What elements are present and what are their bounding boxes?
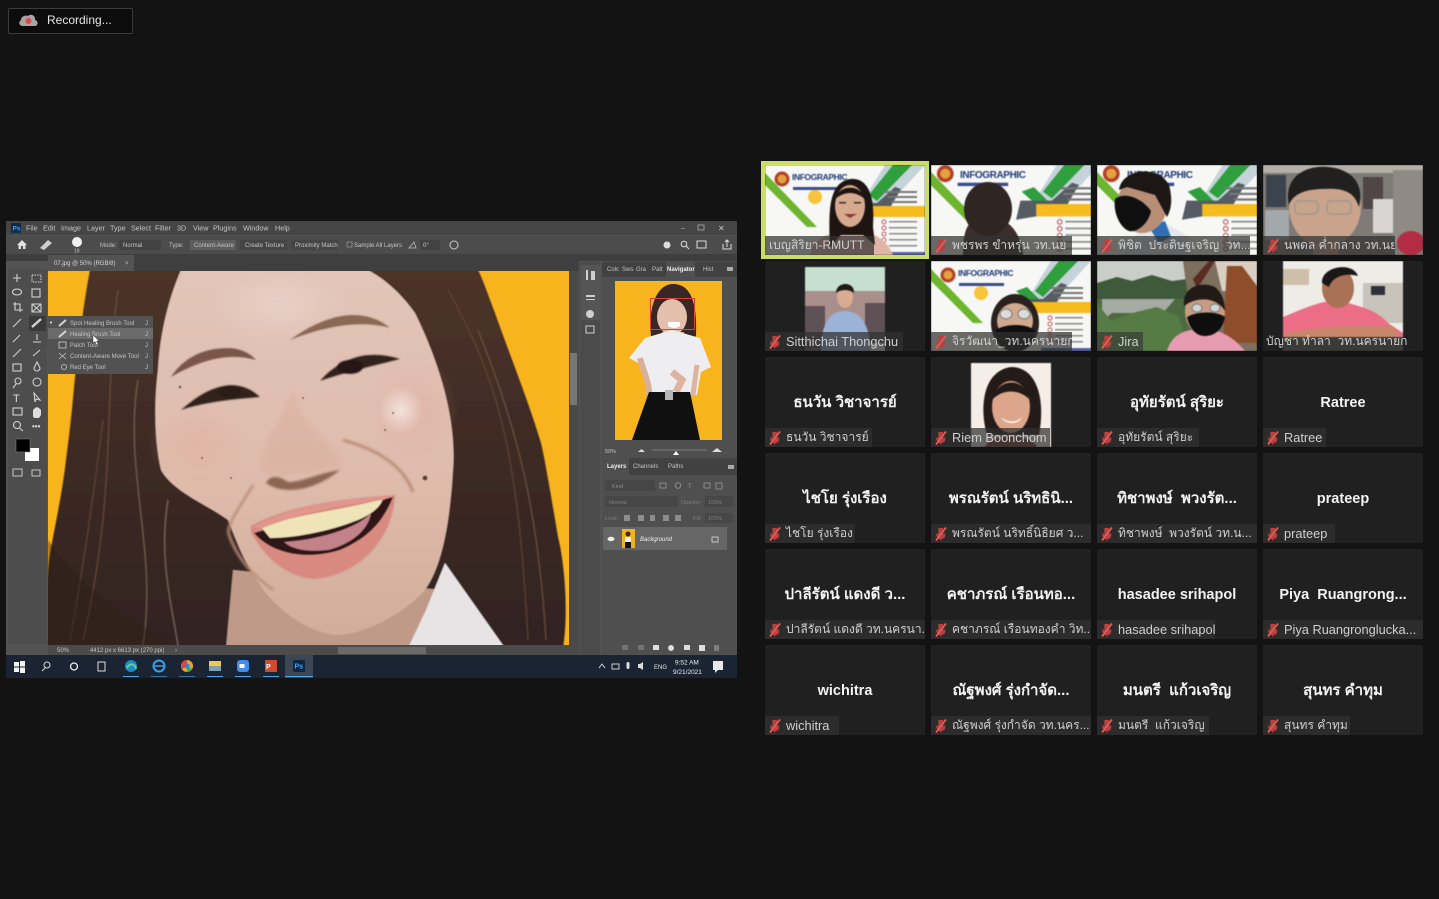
tool bar: T (13, 393, 20, 405)
participant tile: hasadee srihapol (1097, 549, 1257, 639)
video: presenter over infographic backdrop (765, 165, 925, 255)
participant tile: คชาภรณ์ (931, 549, 1091, 639)
display name: ณัฐพงศ์ รุ่งกำจัด... (952, 682, 1070, 699)
vertical scrollbar (569, 271, 579, 645)
name label (931, 716, 1091, 735)
participant tile: อุทัยรัตน์ สุริยะ (1097, 357, 1257, 447)
participant tile: พชรพร (931, 165, 1091, 255)
name label (931, 524, 1091, 543)
name label (1097, 524, 1257, 543)
video: man with glasses in office (1263, 165, 1423, 255)
participant tile: พิชิต (1097, 165, 1257, 255)
options bar: Mode: (100, 243, 117, 249)
panel: layers: Normal (609, 500, 627, 506)
windows taskbar: 9/21/2021 (673, 669, 702, 676)
windows taskbar: P (266, 664, 271, 671)
participant tile: จิรวัฒนา (931, 261, 1091, 351)
windows taskbar: Ps (294, 664, 303, 670)
participant tile: active speaker (765, 165, 925, 255)
menu bar: View (193, 224, 209, 232)
participant tile: ทิชาพงษ์ (1097, 453, 1257, 543)
participant tile: Ratree (1263, 357, 1423, 447)
menu bar: Type (110, 224, 126, 232)
display name: wichitra (818, 683, 872, 699)
right eye (320, 355, 400, 381)
display name: มนตรี แก้วเจริญ (1123, 682, 1231, 699)
name label: Riem Boonchom (952, 430, 1047, 445)
windows taskbar: 9:52 AM (675, 660, 699, 666)
name label (931, 620, 1091, 639)
tool flyout menu: Healing Brush Tool (70, 332, 120, 338)
panel: layers: Kind (612, 484, 623, 490)
name label: พิชิต ประดิษฐเจริญ วท.... (1118, 238, 1250, 252)
display name: อุทัยรัตน์ สุริยะ (1130, 394, 1224, 411)
menu bar: Image (61, 224, 81, 232)
eyebrows (171, 348, 256, 377)
face (155, 270, 454, 635)
participant tile: Piya Ruangrong (1263, 549, 1423, 639)
video: woman with mask by a river (1097, 261, 1257, 351)
tool bar (8, 269, 47, 644)
name label: คชาภรณ์ เรือนทองคำ วิท... (952, 622, 1091, 636)
recording indicator (8, 8, 133, 34)
participant tile: พรณรัตน์ (931, 453, 1091, 543)
name label (765, 428, 872, 447)
panel: navigator: Sws (622, 267, 633, 273)
display name: ปาลีรัตน์ แดงดี ว... (785, 586, 905, 603)
menu bar: Plugins (213, 224, 237, 232)
participant tile: Sitthichai Thongchu (765, 261, 925, 351)
icon: windows start (14, 661, 25, 673)
panel: layers: T (688, 484, 692, 490)
name label (1263, 236, 1395, 255)
menu bar: Filter (155, 224, 172, 232)
document tab: 07.jpg @ 50% (RGB/8) (54, 261, 115, 267)
options bar: Create Texture (245, 243, 285, 249)
panel: navigator (602, 261, 737, 455)
windows taskbar (6, 655, 737, 678)
tool flyout menu: J (145, 321, 148, 327)
menu bar: 3D (177, 224, 186, 232)
document tab: × (125, 261, 129, 267)
panel: navigator: Gra (636, 267, 647, 273)
display name: Piya Ruangrong... (1279, 587, 1407, 603)
name label (765, 236, 874, 255)
panel: navigator: Navigator (667, 267, 695, 273)
display name: ไชโย รุ่งเรือง (803, 490, 887, 507)
name label: Ratree (1284, 430, 1322, 445)
menu bar: – (681, 226, 685, 232)
profile photo (804, 266, 886, 351)
display name: พรณรัตน์ นริทธินิ... (949, 490, 1073, 507)
name label: ไชโย รุ่งเรือง (786, 526, 853, 540)
left eye (181, 385, 260, 410)
video: dark silhouette over backdrop: INFOGRAPHIC (960, 170, 1026, 181)
shared screen: Photoshop window (6, 221, 737, 678)
name label: บัญชา ทำลา วท.นครนายก (1266, 334, 1407, 348)
participant tile: prateep (1263, 453, 1423, 543)
name label: สุนทร คำทุม (1284, 718, 1348, 732)
tool flyout menu: Content-Aware Move Tool (70, 354, 139, 360)
name label: prateep (1284, 526, 1327, 541)
name label: มนตรี แก้วเจริญ (1118, 718, 1205, 732)
name label: ณัฐพงศ์ รุ่งกำจัด วท.นคร... (952, 718, 1090, 732)
participant tile: Jira (1097, 261, 1257, 351)
name label (765, 332, 903, 351)
participant tile: สุนทร (1263, 645, 1423, 735)
navigator thumbnail (615, 281, 722, 440)
name label: จิรวัฒนา_วท.นครนายก (952, 334, 1072, 348)
participant tile: ธนวัน วิชาจารย์ (765, 357, 925, 447)
hair (43, 270, 566, 648)
display name: hasadee srihapol (1118, 587, 1236, 603)
options bar: 19 (74, 248, 80, 254)
panel: layers: 100% (708, 500, 722, 506)
name label: Sitthichai Thongchu (786, 334, 898, 349)
menu bar: Layer (87, 224, 106, 232)
status bar: 50% (57, 648, 70, 654)
moles (179, 386, 428, 480)
name label (1097, 620, 1215, 639)
options bar: Sample All Layers (354, 243, 402, 249)
participant tile: ไชโย รุ่งเรือง (765, 453, 925, 543)
mouth (251, 495, 395, 579)
name label (765, 716, 839, 735)
panel: layers: Paths (668, 464, 683, 470)
participant tile: ปาลีรัตน์ (765, 549, 925, 639)
shirt collar (408, 563, 505, 648)
tool flyout menu: J (145, 354, 148, 360)
video: man with black mask over backdrop: INFOGRAPHIC (1127, 170, 1193, 181)
tool bar: ••• (32, 422, 41, 431)
video: man with black mask over backdrop (1097, 165, 1257, 255)
tool flyout menu: J (145, 343, 148, 349)
display name: ทิชาพงษ์ พวงรัต... (1117, 490, 1237, 507)
name label: Piya Ruangronglucka... (1284, 622, 1416, 637)
menu bar: ✕ (718, 224, 725, 233)
display name: prateep (1317, 491, 1369, 507)
menu bar: Select (131, 224, 151, 232)
active speaker highlight border (761, 161, 929, 259)
panel: navigator: Patt (652, 267, 663, 273)
display name: สุนทร คำทุม (1303, 682, 1383, 699)
video: woman with mask over backdrop (931, 261, 1091, 351)
background layer row (603, 527, 727, 550)
name label: อุทัยรัตน์ สุริยะ (1118, 430, 1193, 444)
name label (1097, 428, 1199, 447)
status bar: 4412 px x 6613 px (270 ppi) (90, 648, 164, 654)
name label (1263, 716, 1350, 735)
nose shadow (266, 470, 340, 490)
icon: recording cloud (19, 14, 38, 26)
status bar: › (175, 648, 177, 654)
name label: hasadee srihapol (1118, 622, 1215, 637)
name label: นพดล ค่ำกลาง วท.นย (1284, 238, 1395, 252)
options bar: Type: (169, 243, 184, 249)
participant tile: wichitra (765, 645, 925, 735)
neck (226, 570, 443, 648)
name label (931, 332, 1072, 351)
document tab (48, 255, 579, 271)
panel: layers: Fill: (693, 516, 702, 522)
name label (765, 524, 855, 543)
tool flyout menu (48, 316, 153, 374)
participant tile: บัญชา (1263, 261, 1423, 351)
panel: layers: Lock: (605, 516, 619, 522)
tool flyout menu: Red Eye Tool (70, 365, 106, 371)
name label (1097, 332, 1143, 351)
menu bar: Ps (12, 226, 21, 232)
name label: ทิชาพงษ์ พวงรัตน์ วท.น... (1118, 526, 1252, 540)
name label (765, 620, 925, 639)
video: woman with mask over backdrop: INFOGRAPHIC (958, 268, 1013, 278)
tool flyout menu: Spot Healing Brush Tool (70, 321, 134, 327)
panel: navigator: Hist (703, 267, 714, 273)
options bar: Proximity Match (295, 243, 338, 249)
background layer row: Background (640, 537, 673, 543)
panel: layers: Channels (633, 464, 658, 470)
name label: เบญสิริยา-RMUTT (769, 238, 864, 252)
windows taskbar: ENG (654, 665, 667, 671)
name label: wichitra (786, 718, 829, 733)
display name: Ratree (1320, 395, 1366, 411)
smile lines (229, 440, 413, 590)
participant tile: Riem Boonchom (931, 357, 1091, 447)
collapsed panel icons (580, 262, 600, 655)
video: man in pink shirt (1282, 261, 1404, 351)
menu bar: Edit (43, 224, 55, 232)
display name: คชาภรณ์ เรือนทอ... (947, 586, 1075, 603)
canvas: close-up portrait (43, 267, 569, 648)
name label (931, 236, 1072, 255)
name label: ธนวัน วิชาจารย์ (786, 430, 869, 444)
options bar: 0° (423, 243, 429, 249)
tool flyout menu: J (145, 332, 148, 338)
tool flyout menu: Patch Tool (70, 343, 98, 349)
participant tile: ณัฐพงศ์ (931, 645, 1091, 735)
name label (1263, 428, 1326, 447)
menu bar (6, 221, 737, 235)
panel: layers: Layers (607, 464, 627, 470)
panel: layers (602, 455, 737, 655)
name label (1263, 620, 1423, 639)
display name: ธนวัน วิชาจารย์ (793, 394, 897, 411)
participant tile: นพดล (1263, 165, 1423, 255)
name label: Jira (1118, 334, 1139, 349)
name label (1263, 524, 1335, 543)
panel: layers: 100% (708, 516, 722, 522)
name label: พรณรัตน์ นริทธิ์นิธิยศ ว... (952, 526, 1083, 540)
options bar: Content-Aware (194, 243, 235, 249)
panel: navigator: 50% (605, 449, 616, 455)
profile photo (970, 362, 1052, 447)
menu bar: File (26, 224, 38, 232)
panel: navigator: Colc (607, 267, 619, 273)
tool flyout menu: J (145, 365, 148, 371)
name label: พชรพร ขำหรุ่น วท.นย (952, 238, 1066, 252)
options bar: Normal (123, 243, 142, 249)
options bar (6, 236, 737, 254)
name label (1097, 236, 1250, 255)
participant tile: มนตรี (1097, 645, 1257, 735)
menu bar: Window (243, 224, 269, 232)
video: dark silhouette over backdrop (931, 165, 1091, 255)
recording label: Recording... (47, 13, 112, 27)
icon: mouse cursor (93, 335, 99, 345)
name label (931, 428, 1050, 447)
panel: layers: Opacity: (681, 500, 702, 506)
video: presenter over infographic backdrop: INFOGRAPHIC (792, 172, 847, 182)
name label (1097, 716, 1209, 735)
menu bar: Help (275, 224, 290, 232)
status bar (48, 645, 579, 655)
foreground and background colours (16, 439, 39, 461)
